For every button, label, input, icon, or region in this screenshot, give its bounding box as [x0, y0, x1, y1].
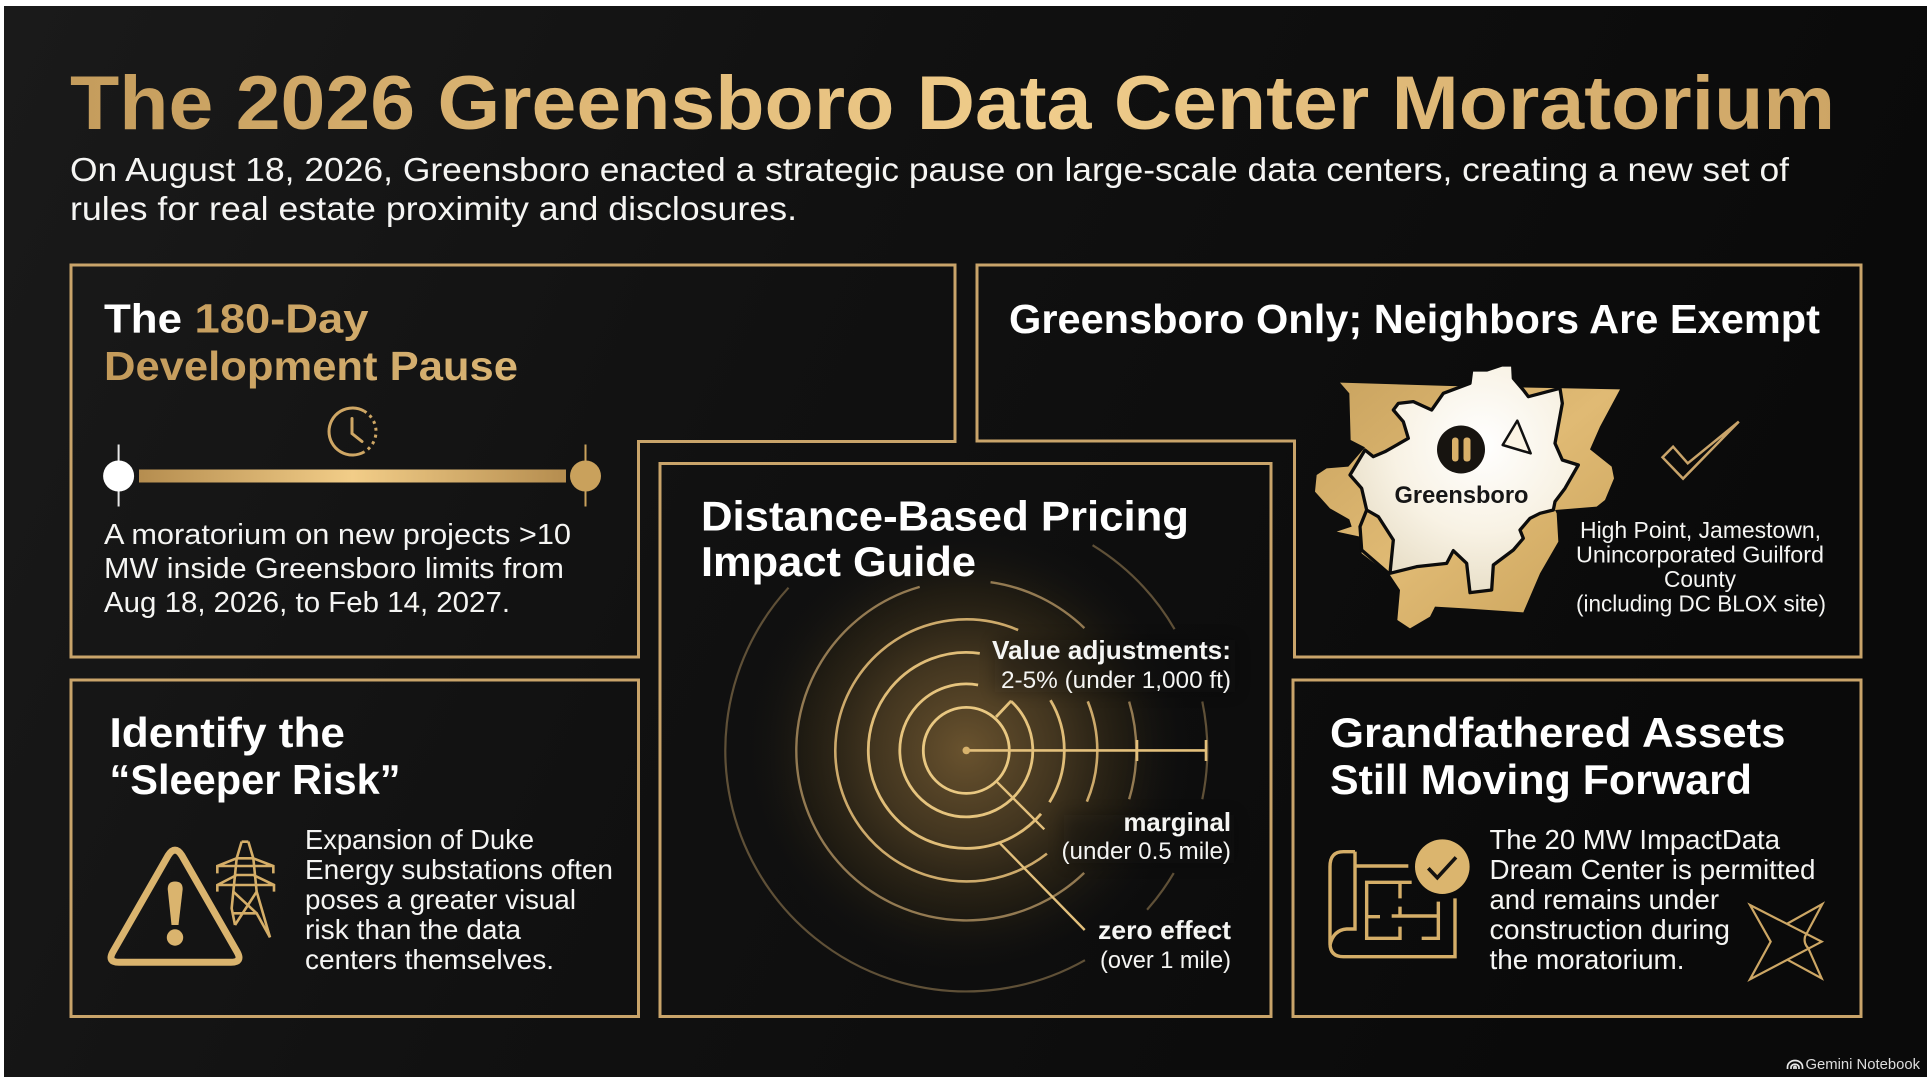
icon: star outline — [1750, 904, 1822, 979]
icon: clock — [329, 408, 376, 455]
heading: neighbors exempt: Greensboro Only; Neighbors Are Exempt — [1009, 296, 1820, 342]
subtitle: On August 18, 2026, Greensboro enacted a strategic pause on large-scale data centers, creating a new set of — [70, 151, 1790, 188]
icon: blueprint with check — [1330, 839, 1470, 957]
icon: pause button — [1437, 426, 1485, 474]
heading: grandfathered assets: Still Moving Forward — [1330, 756, 1752, 803]
body text: ImpactData: construction during — [1490, 914, 1730, 945]
heading: pricing impact guide: Distance-Based Pricing — [701, 492, 1189, 540]
exempt areas text: (including DC BLOX site) — [1576, 590, 1826, 616]
label: value adjustments: 2-5% (under 1,000 ft) — [1001, 667, 1231, 694]
body text: moratorium dates: A moratorium on new projects >10 — [104, 519, 571, 551]
label: value adjustments: Value adjustments: — [992, 635, 1231, 665]
body text: ImpactData — [1490, 824, 1816, 975]
label: zero effect: (over 1 mile) — [1100, 947, 1231, 974]
body text: ImpactData: Dream Center is permitted — [1490, 854, 1816, 885]
label: zero effect: zero effect — [1098, 915, 1231, 945]
heading: 180-day pause: 180-Day — [194, 296, 369, 342]
heading: pricing impact guide — [701, 492, 1189, 585]
heading: 180-day pause: Development Pause — [104, 343, 518, 389]
icon: warning triangle — [111, 850, 239, 962]
heading: sleeper risk — [110, 709, 400, 803]
body text: substations: centers themselves. — [305, 944, 554, 975]
heading: grandfathered assets: Grandfathered Assets — [1330, 709, 1786, 756]
body text: substations: Expansion of Duke — [305, 824, 534, 855]
body text: ImpactData: and remains under — [1490, 884, 1719, 915]
label: marginal — [1062, 807, 1231, 865]
title: The 2026 Greensboro Data Center Moratorium — [70, 61, 1835, 146]
panel: 180-day development pause — [71, 265, 955, 657]
panel: grandfathered assets — [1293, 680, 1861, 1016]
icon: transmission tower — [217, 842, 274, 937]
exempt areas text: Unincorporated Guilford — [1576, 542, 1824, 568]
body text: ImpactData: the moratorium. — [1490, 944, 1684, 975]
radial glow — [741, 525, 1191, 975]
body text: substations: risk than the data — [305, 914, 521, 945]
label: marginal: marginal — [1124, 807, 1231, 837]
body text: ImpactData: The 20 MW ImpactData — [1490, 824, 1780, 855]
heading: sleeper risk: “Sleeper Risk” — [110, 756, 400, 803]
panel: Greensboro only, neighbors exempt — [977, 265, 1861, 657]
label: zero effect — [1098, 915, 1231, 974]
subtitle: rules for real estate proximity and disclosures. — [70, 190, 797, 227]
heading: 180-day pause — [104, 296, 518, 389]
watermark: Gemini Notebook: Gemini Notebook — [1806, 1056, 1920, 1073]
label: value adjustments — [992, 635, 1231, 694]
exempt areas text: County — [1664, 566, 1736, 592]
heading: 180-day pause: The — [104, 296, 182, 342]
label: marginal: (under 0.5 mile) — [1062, 838, 1231, 865]
body text: substations: poses a greater visual — [305, 884, 576, 915]
timeline bar — [103, 444, 601, 506]
subtitle — [70, 151, 1790, 227]
body text: substations: Energy substations often — [305, 854, 613, 885]
map label: Greensboro: Greensboro — [1394, 482, 1528, 509]
body text: moratorium dates: MW inside Greensboro limits from — [104, 553, 564, 585]
exempt areas text: High Point, Jamestown, — [1580, 517, 1821, 543]
heading: pricing impact guide: Impact Guide — [701, 538, 976, 585]
icon: check mark — [1663, 422, 1739, 479]
chart: concentric distance rings — [635, 419, 1298, 1080]
panel: sleeper risk — [71, 680, 638, 1016]
body text: moratorium dates — [104, 519, 571, 619]
map: Greensboro and surrounding county — [1315, 365, 1620, 628]
panel: distance-based pricing — [635, 419, 1298, 1080]
body text: moratorium dates: Aug 18, 2026, to Feb 14, 2027. — [104, 587, 510, 619]
exempt areas text — [1576, 517, 1826, 616]
body text: substations — [305, 824, 613, 975]
heading: sleeper risk: Identify the — [110, 709, 345, 756]
heading: grandfathered assets — [1330, 709, 1786, 803]
